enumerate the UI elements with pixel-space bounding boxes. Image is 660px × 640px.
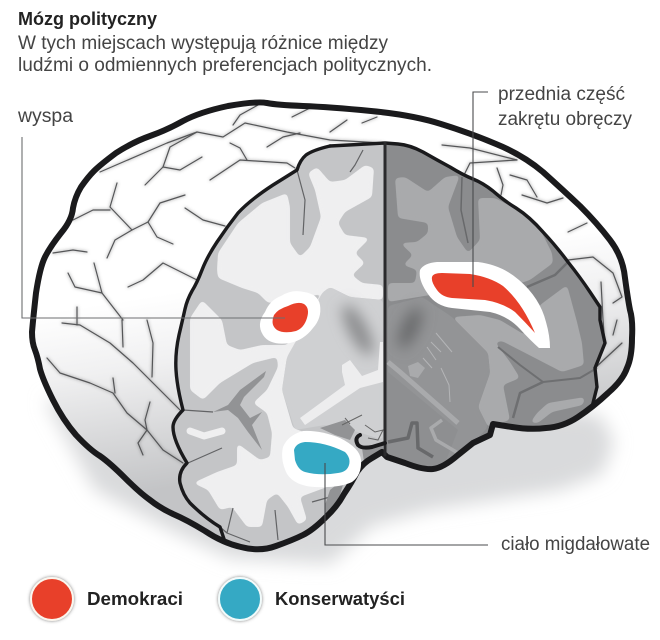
legend: Konserwatyści: [219, 578, 405, 620]
brain shadow: [45, 400, 614, 564]
region: anterior cingulate: [420, 262, 550, 348]
leader: ciało migdałowate: [325, 463, 488, 545]
sulcus wedges: [213, 371, 383, 520]
right cross-section: [385, 143, 605, 470]
right sulci: [388, 177, 597, 457]
lower nuclei shade: [388, 372, 458, 470]
title: Mózg polityczny: [18, 9, 157, 29]
temporal notch: [356, 435, 385, 448]
subtitle text: [18, 33, 432, 76]
deep nuclei: [282, 287, 383, 440]
section contour top and right: [330, 143, 605, 407]
capsule streak: [388, 362, 458, 423]
leader: przednia część: [473, 92, 488, 287]
region: insula: [260, 291, 320, 344]
dark blur right: [393, 305, 427, 351]
subtitle text: W tych miejscach występują różnice między: [18, 33, 388, 54]
dark blur left: [337, 301, 379, 359]
outer contour: [32, 102, 632, 549]
white matter shapes: [190, 165, 383, 527]
right white matter: [388, 175, 585, 427]
central line: [384, 143, 386, 455]
subtitle text: ludźmi o odmiennych preferencjach politycznych.: [18, 55, 432, 76]
section contour left: [173, 146, 330, 542]
striatum ticks: [423, 333, 452, 402]
right nuclei: [388, 297, 490, 470]
label: przednia część zakrętu obręczy: zakrętu obręczy: [498, 109, 632, 130]
legend: Demokraci: Demokraci: [87, 589, 183, 609]
amygdala sulcus detail: [342, 415, 383, 440]
label: wyspa: wyspa: [17, 106, 73, 127]
white streak in lower lobe: [190, 431, 222, 436]
legend: Demokraci: [31, 578, 183, 620]
region: amygdala: [282, 431, 361, 487]
brain outlines: [32, 102, 632, 549]
left section base: [173, 143, 385, 550]
leader: wyspa: [22, 137, 285, 318]
right section base: [385, 143, 605, 470]
internal sulci: [183, 150, 363, 542]
brain illustration: [32, 102, 632, 550]
label: przednia część zakrętu obręczy: [498, 84, 632, 130]
label: przednia część zakrętu obręczy: przednia część: [498, 84, 625, 105]
surface sulci: [47, 105, 622, 463]
brain outer surface: [32, 102, 632, 549]
label: ciało migdałowate: ciało migdałowate: [501, 534, 650, 555]
left cross-section: [173, 143, 385, 550]
legend: Konserwatyści: Konserwatyści: [275, 589, 405, 609]
white internal capsule: [300, 342, 383, 425]
